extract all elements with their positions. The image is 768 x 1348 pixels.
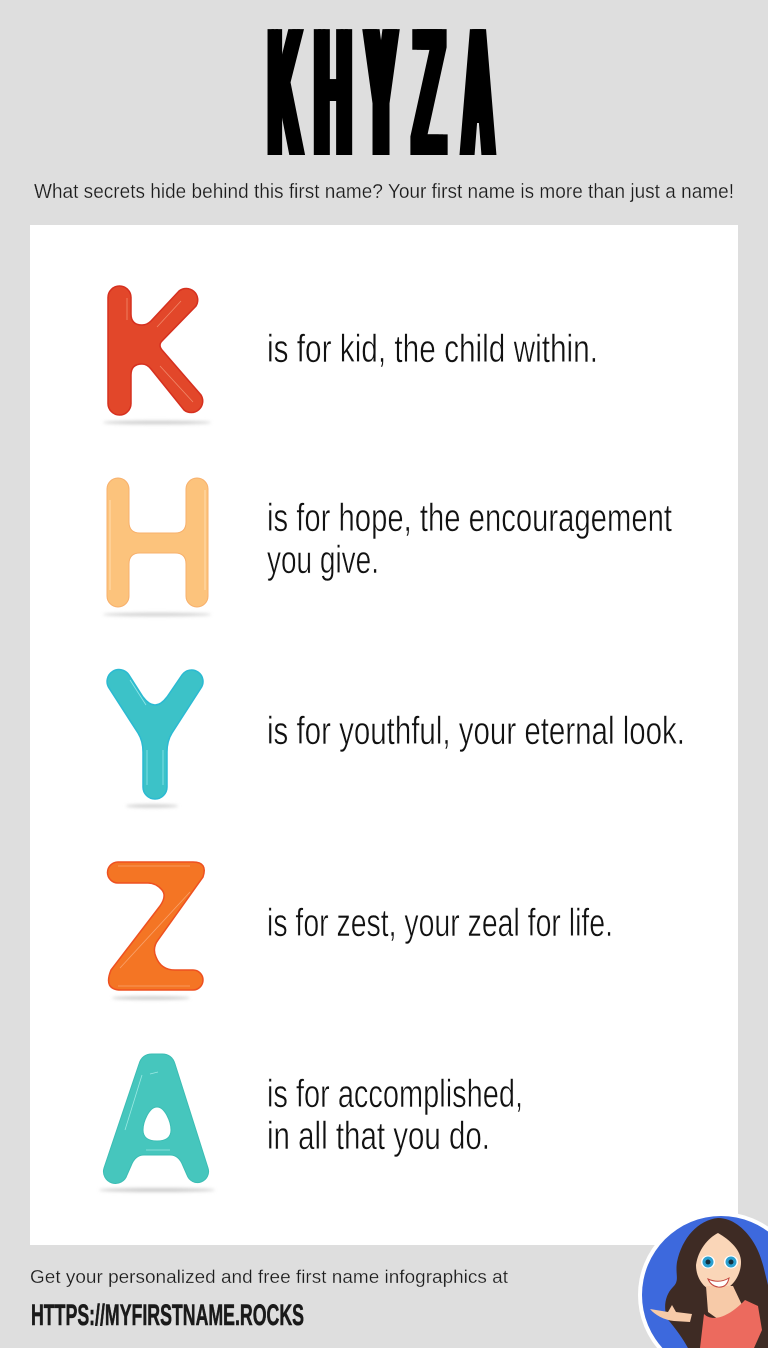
avatar: cartoon woman in blue circle <box>638 1212 768 1348</box>
footer url: HTTPS://MYFIRSTNAME.ROCKS <box>31 1299 304 1332</box>
text: A meaning: in all that you do. <box>267 1115 490 1158</box>
icon: letter H <box>103 478 211 616</box>
row: letter Z <box>108 862 613 1000</box>
footer invitation text: Get your personalized and free first name infographics at <box>30 1266 508 1287</box>
text: H meaning: you give. <box>267 539 379 582</box>
row: letter H <box>103 478 672 616</box>
row: letter Y <box>107 670 685 808</box>
text: K meaning: is for kid, the child within. <box>267 328 598 371</box>
icon: letter Y <box>107 670 203 808</box>
subtitle: What secrets hide behind this first name? Your first name is more than just a name! <box>34 181 734 203</box>
text: A meaning <box>267 1073 523 1158</box>
title <box>268 0 496 194</box>
icon: letter Z <box>108 862 204 1000</box>
text: Z meaning: is for zest, your zeal for life. <box>267 902 613 945</box>
icon: letter K <box>103 286 211 424</box>
row: letter K <box>103 286 598 424</box>
row: letter A <box>99 1054 523 1192</box>
panel: name letters <box>30 225 738 1245</box>
icon: letter A <box>99 1054 215 1192</box>
text: H meaning <box>267 497 672 582</box>
text: A meaning: is for accomplished, <box>267 1073 523 1116</box>
